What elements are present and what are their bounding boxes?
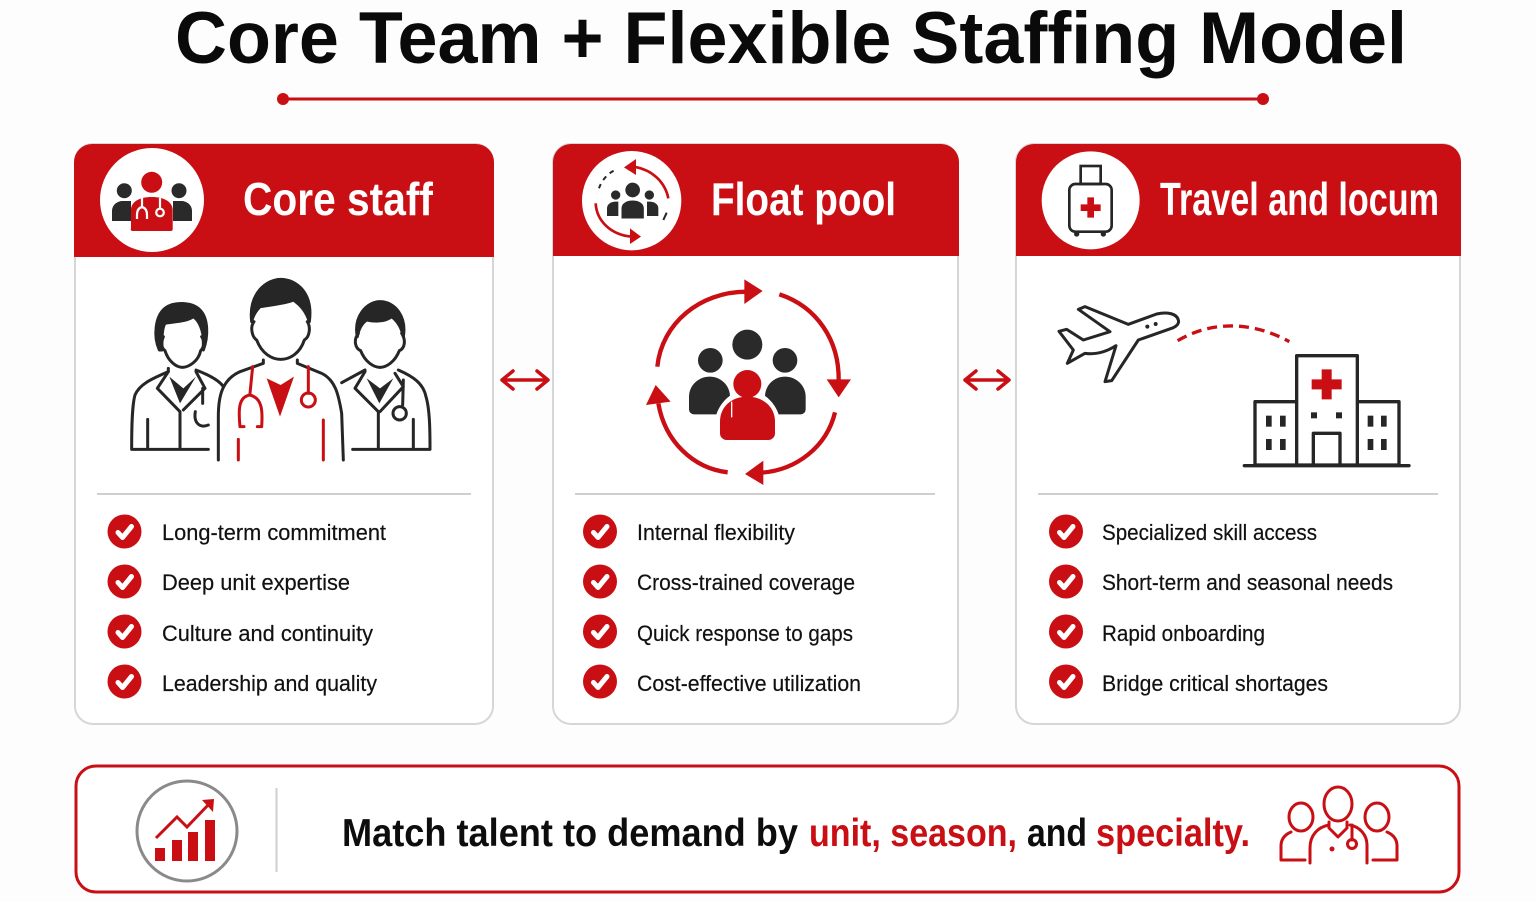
check item xyxy=(108,514,387,548)
check item: Short-term and seasonal needs xyxy=(1102,570,1393,595)
float pool heading: Float pool xyxy=(711,173,896,225)
check item: Culture and continuity xyxy=(162,621,374,646)
check item: Cost-effective utilization xyxy=(637,671,861,696)
check item xyxy=(583,614,853,648)
icon: airplane with flight path xyxy=(1059,307,1289,382)
panel: bottom callout xyxy=(76,766,1459,892)
check item: Quick response to gaps xyxy=(637,621,853,646)
travel header band xyxy=(1016,144,1461,256)
check item: Bridge critical shortages xyxy=(1102,671,1328,696)
core staff heading: Core staff xyxy=(243,173,434,225)
core staff header band xyxy=(74,144,494,257)
float pool header band xyxy=(553,144,959,256)
callout text xyxy=(342,812,1250,855)
panel: travel and locum xyxy=(1016,144,1461,724)
title underline xyxy=(277,93,1269,105)
divider xyxy=(575,493,935,495)
check item xyxy=(108,664,378,698)
callout text: Match talent to demand by xyxy=(342,812,798,855)
list: float pool benefits xyxy=(583,514,861,698)
list: core staff benefits xyxy=(108,514,387,698)
callout text: unit, season, xyxy=(809,812,1017,855)
divider xyxy=(276,788,278,872)
divider xyxy=(97,493,471,495)
icon: core staff badge xyxy=(100,148,204,252)
check item: Specialized skill access xyxy=(1102,520,1317,545)
check item xyxy=(1049,664,1328,698)
travel heading: Travel and locum xyxy=(1160,173,1439,225)
icon: hospital xyxy=(1244,356,1409,466)
list: travel and locum benefits xyxy=(1049,514,1393,698)
arrow: float to travel xyxy=(965,371,1009,389)
title: Core Team + Flexible Staffing Model xyxy=(175,0,1407,79)
callout text: and xyxy=(1027,812,1087,855)
check item xyxy=(583,564,855,598)
check item: Rapid onboarding xyxy=(1102,621,1265,646)
check item xyxy=(1049,564,1393,598)
check item: Internal flexibility xyxy=(637,520,796,545)
callout text: specialty. xyxy=(1096,812,1250,855)
check item xyxy=(583,664,861,698)
divider xyxy=(1038,493,1438,495)
icon: three doctors xyxy=(132,279,430,460)
panel: float pool xyxy=(553,144,959,724)
check item: Cross-trained coverage xyxy=(637,570,855,595)
panel: core staff xyxy=(74,144,494,724)
check item xyxy=(583,514,796,548)
icon: growth chart xyxy=(137,781,237,881)
icon: float pool badge xyxy=(582,151,681,250)
icon: red outline team xyxy=(1281,787,1397,863)
check item xyxy=(108,614,374,648)
icon: rotating pool xyxy=(646,279,851,485)
check item xyxy=(108,564,350,598)
check item: Long-term commitment xyxy=(162,520,387,545)
icon: medical suitcase badge xyxy=(1042,151,1140,249)
arrow: core to float xyxy=(502,371,548,389)
check item: Leadership and quality xyxy=(162,671,378,696)
check item: Deep unit expertise xyxy=(162,570,350,595)
check item xyxy=(1049,514,1317,548)
check item xyxy=(1049,614,1265,648)
